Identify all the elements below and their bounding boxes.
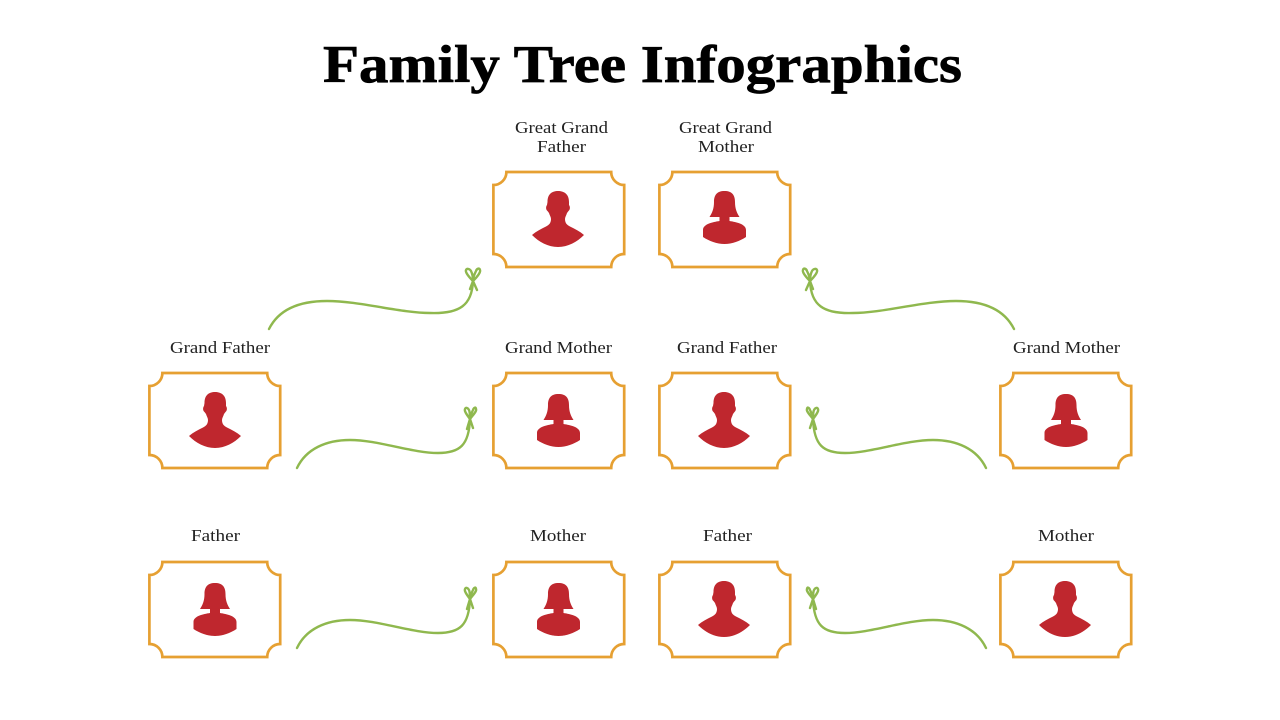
arrow: grand parents to great grand mother [803, 269, 1014, 329]
label: great grand mother [679, 118, 773, 156]
label: grand mother left: Grand Mother [505, 338, 613, 357]
card: great grand father [493, 172, 624, 267]
arrow: grand father to grand mother left [297, 408, 476, 468]
arrow: mother to father right [807, 588, 986, 648]
card: grand mother right [1000, 373, 1131, 468]
label: grand father right: Grand Father [677, 338, 778, 357]
arrow: grand parents to great grand father [269, 269, 480, 329]
label: grand mother right: Grand Mother [1013, 338, 1121, 357]
label: great grand father [515, 118, 609, 156]
arrow: father to mother left [297, 588, 476, 648]
title: Family Tree Infographics [323, 36, 962, 94]
card: mother right [1000, 562, 1131, 657]
label: great grand mother: Great Grand [679, 118, 773, 137]
card: father left [149, 562, 280, 657]
label: mother left: Mother [530, 526, 587, 545]
arrow: grand mother to grand father right [807, 408, 986, 468]
card: grand mother left [493, 373, 624, 468]
label: mother right: Mother [1038, 526, 1095, 545]
card: father right [659, 562, 790, 657]
label: father right: Father [703, 526, 753, 545]
label: father left: Father [191, 526, 241, 545]
label: grand father left: Grand Father [170, 338, 271, 357]
card: mother left [493, 562, 624, 657]
label: great grand mother: Mother [698, 137, 755, 156]
label: great grand father: Great Grand [515, 118, 609, 137]
card: grand father left [149, 373, 280, 468]
card: grand father right [659, 373, 790, 468]
card: great grand mother [659, 172, 790, 267]
label: great grand father: Father [537, 137, 587, 156]
